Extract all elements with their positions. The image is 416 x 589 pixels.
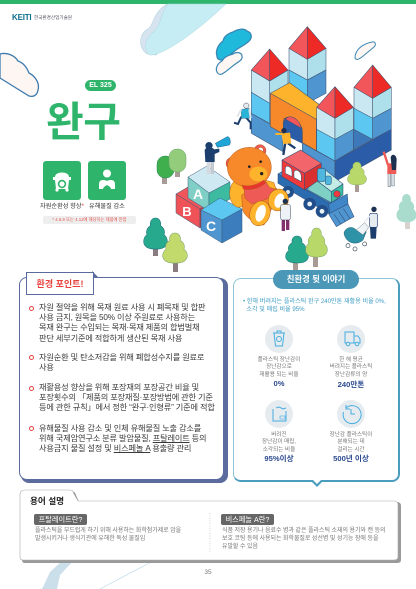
person running [234,103,251,129]
stat: decompose: 분해되는 데 [337,439,365,445]
text 4: 유해물질 사용 감소 및 인체 유해물질 노출 감소를 [39,424,201,433]
text 2: 자원순환 및 탄소저감을 위해 폐합성수지를 원료로 [39,353,204,362]
text 2 [39,353,204,372]
bullet 1 [29,306,34,311]
intro text [243,298,386,313]
term text: phthalate: 플라스틱을 부드럽게 하기 위해 사용하는 화학첨가제로 암을 [35,528,181,534]
stat: amount [330,356,372,378]
number: 240만톤: 240만톤 [338,380,364,389]
stat: incinerated: 장난감이 매립, [262,439,296,445]
text 3: 포장횟수의 「제품의 포장재질·포장방법에 관한 기준 [39,393,213,402]
icon: clock [337,400,365,428]
blocks A B C [176,166,242,243]
text 1: 자원 절약을 위해 목재 원료 사용 시 폐목재 및 합판 [39,303,205,312]
stat: amount: 장난감류의 양 [335,372,367,378]
person at arch [275,128,295,155]
text 4: 사용금지 물질 설정 및 비스페놀 A 용출량 관리 [39,444,191,453]
number: 500 years: 500년 이상 [333,454,369,463]
cloud: bottom left [42,560,155,589]
icon: recycling bin [265,325,293,353]
number: 0%: 0% [274,379,284,388]
panel: eco story [233,278,400,482]
text 4: 위해 국제암연구소 분류 발암물질, 프탈레이트 등의 [39,434,206,443]
person waving [384,152,397,187]
stat: amount: 한 해 평균 [339,357,363,363]
icon: harmful substance reduction [88,161,126,200]
logo: KEITI [12,13,31,22]
train [278,150,354,227]
term pill: phthalate [34,514,87,525]
blocks A B C: C [206,218,216,234]
tab: environmental points: 환경 포인트! [37,279,83,289]
callout pointer [312,480,322,487]
people [205,103,397,251]
castle [251,27,391,182]
text 4 [39,424,206,453]
person with stroller [344,207,377,251]
text 2: 사용 [39,363,54,372]
note: * 4.6.9 또는 4.13에 해당하는 제품에 한함 [52,217,127,222]
badge: EL 325: EL 325 [89,82,112,89]
glossary heading: 용어 설명 [30,496,64,506]
text 3: 재활용성 향상을 위해 포장재의 포장공간 비율 및 [39,383,199,392]
person white shirt [281,199,290,231]
term text: bisphenol A: 유발할 수 있음 [222,544,258,550]
title: 완구 [46,99,120,145]
stat: recycled: 재활용 되는 비율 [259,372,299,378]
tab fold [92,271,98,277]
number: 95%: 95%이상 [264,454,294,463]
stat: amount: 버려지는 플라스틱 [330,364,372,370]
term pill: phthalate: 프탈레이트란? [39,515,82,524]
bullet 3 [29,386,34,391]
term text: phthalate: 발생시키거나 생식기관에 유해한 독성 물질임 [35,536,145,542]
top green bar [0,0,416,4]
text 1 [39,303,206,343]
text 1: 판단 세부기준에 적합하게 생산된 목재 사용 [39,334,182,343]
bullet 2 [29,355,34,360]
teddy bear [226,145,291,228]
term text: bisphenol A [222,526,386,550]
icon: truck [337,325,365,353]
icon: landfill [265,400,293,428]
icon: resource recycling [43,161,81,200]
intro text: 소각 및 매립 비율 95% [246,306,305,313]
term pill: bisphenol A [221,514,274,525]
text 3 [39,383,215,412]
person with megaphone [205,137,230,174]
term text: phthalate [35,526,181,542]
stat: decompose: 걸리는 시간 [337,447,365,453]
logo [12,13,72,22]
tab: environmental points [26,272,94,295]
term pill: bisphenol A: 비스페놀 A란? [226,515,269,524]
text 3: 등에 관한 규칙」에서 정한 “완구·인형류” 기준에 적합 [39,403,215,412]
stat: recycled [258,356,300,378]
stat: recycled: 플라스틱 장난감이 [258,357,300,363]
blocks A B C: A [193,186,203,202]
text 1: 목재 완구는 수입되는 목재·목재 제품의 합법벌채 [39,323,200,332]
stat: incinerated [262,431,296,453]
heading pill: eco story: 친환경 뒷 이야기 [287,274,345,284]
term text: bisphenol A: 식품 저장 용기나 음료수 병과 같은 플라스틱 소재의 용기와 캔 등의 [222,528,386,534]
cloud: small blue [216,29,251,60]
cloud: small white [216,53,242,74]
note [43,216,136,224]
trees [144,149,416,272]
label: harmful substance: 유해물질 감소 [89,203,125,210]
panel: glossary [20,490,401,563]
stat: recycled: 장난감으로 [266,364,292,370]
text 1: 사용 금지, 원목을 50% 이상 주원료로 사용하는 [39,313,195,322]
stat: incinerated: 버려진 [271,432,287,438]
badge: EL 325 [85,80,116,91]
cloud: top centre [140,4,226,55]
logo: 한국환경산업기술원 [34,15,72,20]
stat: decompose [330,431,372,453]
stat: decompose: 장난감 플라스틱이 [330,432,372,438]
panel: environmental points [19,277,228,483]
page number: 35 [204,569,212,576]
intro text: • 한해 버려지는 플라스틱 완구 240만톤 재활용 비율 0%, [243,298,386,305]
stat: incinerated: 소각되는 비율 [263,447,295,453]
cloud: small right [355,42,375,59]
label: resource recycling: 자원순환성 향상* [40,203,84,210]
cloud: left [0,53,38,96]
heading pill: eco story [273,270,359,289]
blocks A B C: B [182,204,192,219]
term text: bisphenol A: 보호 코팅 등에 사용되는 화학물질로 성선병 및 성기능 장애 등을 [222,536,378,542]
bullet 4 [29,426,34,431]
